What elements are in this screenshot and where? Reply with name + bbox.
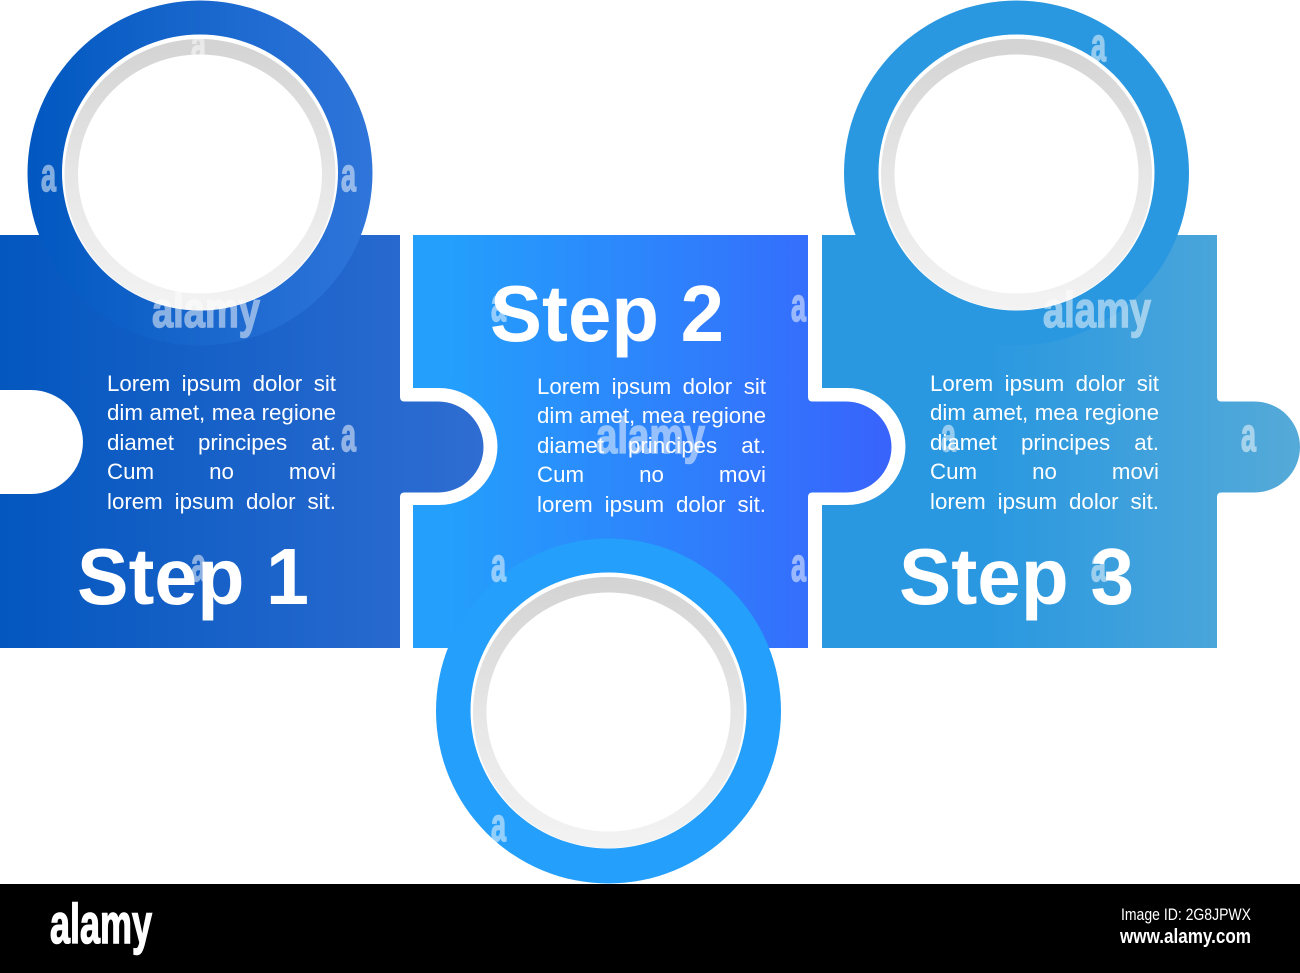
text block: step 3 description: diamet principes at. <box>930 430 1159 454</box>
watermark overlay: a <box>1091 538 1106 591</box>
watermark overlay: alamy <box>1043 282 1151 338</box>
text block: step 2 description: lorem ipsum dolor sit. <box>537 492 766 516</box>
watermark overlay: a <box>41 148 56 201</box>
watermark overlay: a <box>491 798 506 851</box>
text block: step 3 description: Cum no movi <box>930 459 1159 484</box>
footer url: www.alamy.com <box>1119 926 1251 948</box>
text block: step 2 description: diamet principes at. <box>537 432 766 458</box>
heading: step 2: Step 2 <box>490 269 724 358</box>
watermark overlay: a <box>941 408 956 461</box>
watermark overlay: a <box>1241 408 1256 461</box>
footer image id: Image ID: 2G8JPWX <box>1121 905 1251 924</box>
watermark overlay: a <box>341 408 356 461</box>
watermark overlay: a <box>341 148 356 201</box>
heading: step 1: Step 1 <box>77 532 309 621</box>
watermark overlay: a <box>791 278 806 331</box>
text block: step 1 description <box>107 370 336 514</box>
text block: step 1 description: diamet principes at. <box>107 430 336 454</box>
watermark overlay: a <box>791 538 806 591</box>
footer logo: alamy <box>50 892 152 955</box>
heading: step 3: Step 3 <box>899 532 1134 621</box>
watermark overlay: a <box>191 18 206 71</box>
text block: step 3 description: Lorem ipsum dolor sit <box>930 370 1159 396</box>
icon: step 2 circle <box>436 538 781 884</box>
text block: step 3 description: dim amet, mea regione <box>930 400 1159 425</box>
text block: step 3 description: lorem ipsum dolor sit. <box>930 488 1159 514</box>
panel: step 2 puzzle piece <box>413 235 892 648</box>
text block: step 3 description <box>930 370 1159 514</box>
watermark overlay: a <box>491 278 506 331</box>
watermark overlay: a <box>191 538 206 591</box>
watermark overlay: alamy <box>596 408 705 464</box>
footer bar <box>0 884 1300 973</box>
watermark overlay: a <box>491 538 506 591</box>
watermark overlay: a <box>1091 18 1106 71</box>
icon: step 3 circle <box>844 0 1189 346</box>
text block: step 1 description: Cum no movi <box>107 459 336 484</box>
icon: step 1 circle <box>28 0 372 346</box>
text block: step 2 description: Cum no movi <box>537 462 766 487</box>
watermark overlay: alamy <box>152 282 260 338</box>
text block: step 2 description: Lorem ipsum dolor sit <box>537 374 766 398</box>
text block: step 1 description: Lorem ipsum dolor sit <box>107 370 336 396</box>
text block: step 2 description <box>537 374 766 516</box>
text block: step 2 description: dim amet, mea regione <box>537 403 766 428</box>
panel: step 1 puzzle piece <box>0 235 484 648</box>
text block: step 1 description: dim amet, mea regione <box>107 400 336 425</box>
text block: step 1 description: lorem ipsum dolor sit. <box>107 488 336 514</box>
panel: step 3 puzzle piece <box>822 235 1300 648</box>
